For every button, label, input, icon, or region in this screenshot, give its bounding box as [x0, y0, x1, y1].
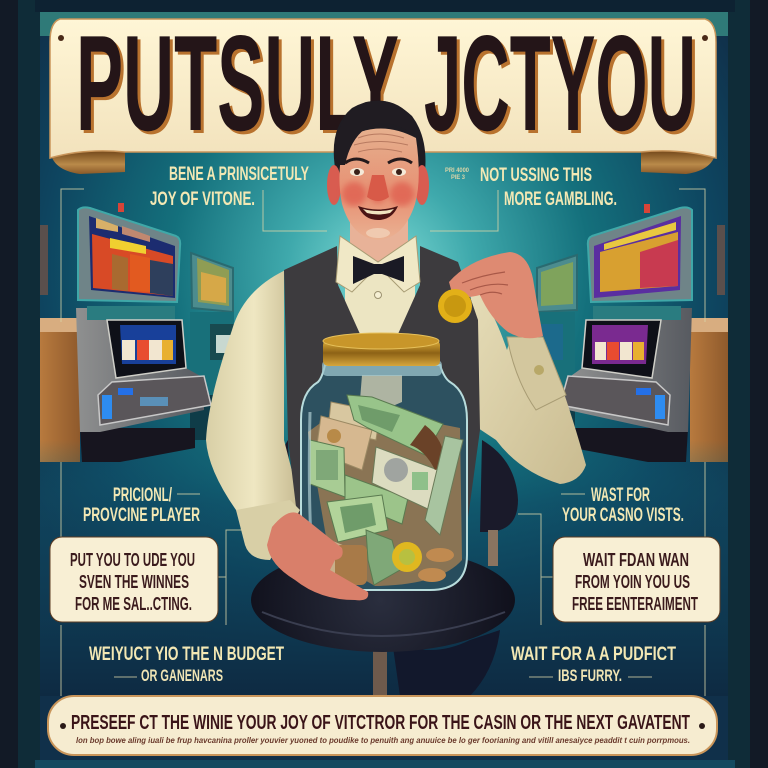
gold coin in jar	[392, 542, 422, 572]
cuff button	[534, 365, 544, 375]
ears	[327, 165, 429, 205]
raised hand	[449, 252, 543, 338]
banner rivets	[58, 35, 64, 41]
lid top	[323, 333, 439, 349]
callout text: upper right	[445, 165, 617, 210]
jar glass	[301, 365, 467, 590]
man	[206, 101, 586, 600]
shirt through glass	[360, 375, 402, 405]
banner body	[50, 19, 716, 158]
room wainscot and floor	[40, 225, 728, 696]
hair back	[334, 101, 426, 182]
callout text: middle right	[562, 485, 684, 526]
loose coins	[418, 548, 454, 582]
jar neck	[322, 360, 442, 376]
eyebrows	[345, 159, 412, 163]
callout text: upper right: PIE 3	[451, 175, 466, 181]
connector lines	[61, 189, 705, 696]
right ribbon curl	[641, 150, 716, 174]
bow tie	[353, 256, 404, 284]
blue buttons	[655, 395, 665, 419]
callout text: upper right: MORE GAMBLING.	[504, 189, 617, 210]
side bills	[425, 436, 463, 535]
cheeks	[342, 181, 414, 206]
callout text: upper left: BENE A PRINSICETULY	[169, 164, 309, 185]
slot machine: back left	[190, 253, 234, 440]
top screen	[594, 216, 681, 298]
reel display	[120, 325, 176, 364]
forehead wrinkles	[354, 134, 408, 152]
nose	[367, 175, 389, 201]
callout text: middle left: PRICIONL/	[113, 485, 172, 506]
lower left cuff	[236, 500, 300, 560]
callout text: upper left	[150, 164, 309, 210]
middle strip	[593, 306, 681, 320]
hair top	[335, 101, 414, 165]
left sleeve	[206, 268, 302, 540]
beacon light	[118, 203, 124, 212]
neck	[350, 215, 408, 280]
green bills	[310, 395, 443, 585]
curled bill	[372, 447, 438, 510]
console	[560, 376, 670, 425]
callout text: lower left	[89, 644, 284, 685]
shirt front	[345, 262, 415, 400]
face	[339, 128, 419, 240]
held coin	[438, 289, 472, 323]
right sleeve	[470, 285, 586, 484]
left callout box: FOR ME SAL..CTING.	[75, 594, 192, 614]
top banner	[50, 7, 716, 174]
finger shading	[462, 272, 508, 295]
callout text: middle left: PROVCINE PLAYER	[83, 505, 200, 526]
smile	[358, 206, 398, 220]
left callout box	[50, 537, 218, 622]
top display cabinet	[78, 207, 180, 302]
collar	[336, 236, 420, 292]
lower cabinet	[76, 308, 204, 432]
teeth	[363, 209, 394, 214]
callout text: middle right: WAST FOR	[591, 485, 650, 506]
right cuff	[507, 337, 566, 410]
slot machine: left	[76, 203, 211, 462]
reel window	[582, 320, 661, 378]
reel display	[592, 325, 648, 364]
title shadow: PUTSULY	[79, 10, 402, 162]
banner dots	[60, 723, 66, 729]
vest	[284, 246, 480, 540]
cabinet base	[573, 428, 688, 462]
eyes	[350, 168, 406, 176]
bill portrait	[384, 458, 408, 482]
right callout box: FREE EENTERAIMENT	[572, 594, 698, 614]
coin stack	[335, 545, 367, 585]
chin highlight	[366, 228, 390, 238]
banner fine print: lon bop bowe aling iuali be frup havcanina proller youvier yuoned to poudike to penuith ang anuuice be lo ger foorianing and vitill anesaiyce peaddit t cuin porrpmous.	[76, 736, 690, 745]
callout text: upper right: NOT USSING THIS	[480, 165, 592, 186]
jar	[301, 333, 467, 590]
tan bills	[316, 402, 380, 585]
title: PUTSULY	[76, 7, 399, 159]
curl shadow	[410, 425, 445, 470]
right callout box	[553, 537, 720, 622]
callout text: middle right: YOUR CASNO VISTS.	[562, 505, 684, 526]
beacon light	[644, 204, 650, 213]
cabinet base	[80, 428, 195, 462]
right callout box: FROM YOIN YOU US	[575, 572, 690, 592]
reel window	[107, 320, 186, 378]
left callout box: PUT YOU TO UDE YOU	[70, 550, 195, 570]
bottom banner	[48, 696, 717, 755]
callout text: upper right: PRI 4000	[445, 168, 470, 174]
jar shine	[309, 412, 312, 555]
slot machine: right	[560, 204, 692, 462]
left ribbon curl	[50, 150, 125, 174]
console	[98, 376, 211, 425]
stool seat	[251, 548, 515, 652]
callout text: lower right: WAIT FOR A A PUDFICT	[511, 644, 676, 665]
callout text: middle left	[83, 485, 200, 526]
top screen	[89, 216, 175, 298]
middle strip	[87, 306, 175, 320]
lower cabinet	[568, 308, 692, 432]
callout text: lower left: WEIYUCT YIO THE N BUDGET	[89, 644, 284, 665]
top display cabinet	[588, 207, 692, 302]
blue buttons	[102, 395, 112, 419]
chair back and legs	[271, 440, 518, 696]
lower left hand	[267, 512, 368, 600]
jar lid	[323, 340, 440, 366]
slot machine: back right	[535, 255, 577, 440]
cash backdrop	[308, 405, 462, 586]
callout text: lower right	[511, 644, 676, 685]
callout text: lower left: OR GANENARS	[141, 666, 223, 685]
right callout box: WAIT FDAN WAN	[583, 550, 689, 570]
bill panel	[412, 472, 428, 490]
callout text: lower right: IBS FURRY.	[558, 666, 622, 685]
left callout box: SVEN THE WINNES	[79, 572, 189, 592]
shirt button	[374, 292, 382, 298]
callout text: upper left: JOY OF VITONE.	[150, 189, 255, 210]
